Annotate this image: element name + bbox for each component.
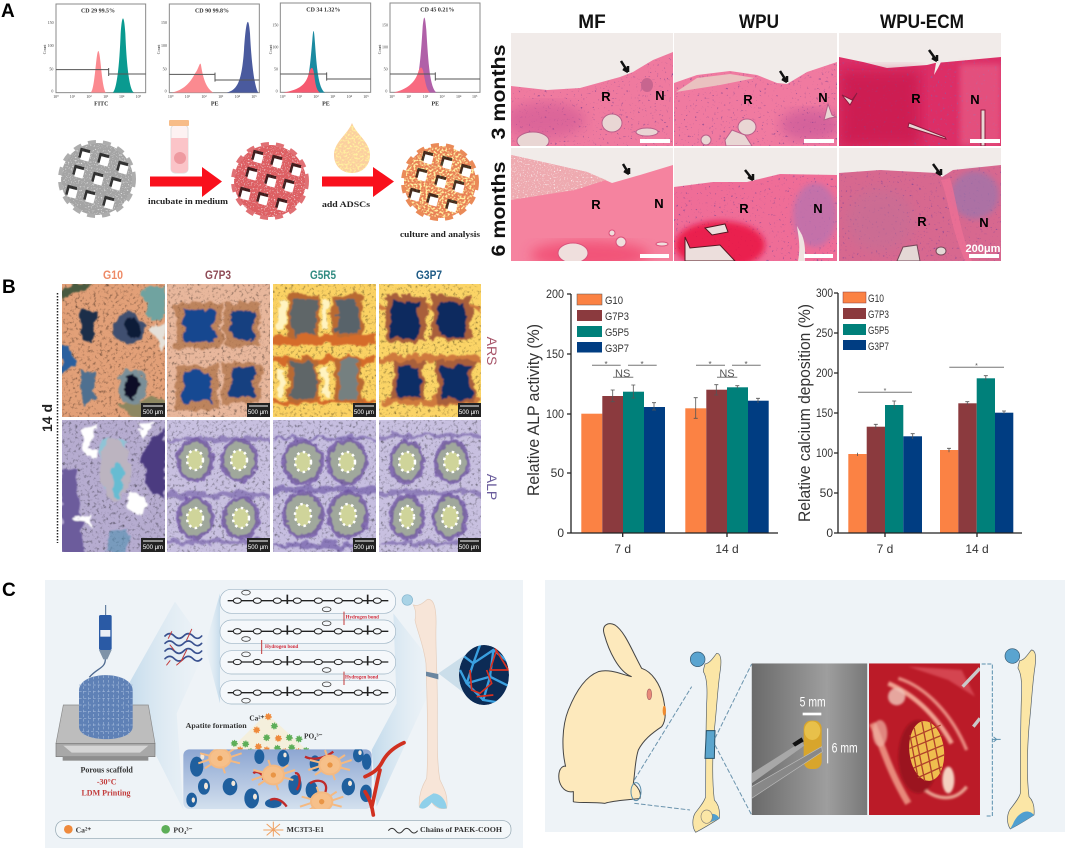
- legend: G3P7: [868, 341, 889, 353]
- histogram CD 34: 0: [276, 89, 278, 94]
- tick labels: [546, 287, 739, 556]
- ARS image: G10: 500 μm: [143, 410, 163, 416]
- dashed zoom lines: femur to photos: [715, 664, 752, 815]
- ALP image: G3P7: [379, 420, 481, 552]
- tick labels: 0: [557, 526, 564, 540]
- column titles: histology: WPU-ECM: [880, 12, 964, 33]
- row label: 14 d: 14 d: [39, 404, 55, 432]
- femur bone: [402, 595, 447, 809]
- tick labels: 200: [546, 287, 564, 301]
- histogram CD 29: 100: [48, 43, 54, 48]
- tick labels: 7 d: [877, 542, 893, 556]
- histogram CD 45: 100: [382, 45, 388, 50]
- histogram CD 29: [42, 4, 146, 107]
- apatite labels: PO₄³⁻: [304, 731, 323, 740]
- tick labels: 100: [546, 407, 564, 421]
- histogram CD 90: Count: [156, 44, 161, 54]
- histogram CD 29: 150: [48, 20, 54, 25]
- axes: [567, 294, 778, 537]
- panel label C: C: [2, 580, 16, 601]
- histogram CD 29: 10³: [103, 94, 109, 99]
- histology: WPU-ECM 6 months: [839, 148, 1001, 261]
- histogram CD 29: 10⁵: [136, 94, 142, 99]
- apatite labels: [186, 713, 323, 740]
- histogram CD 45: PE: [432, 101, 439, 107]
- histology: WPU-ECM 3 months: [839, 33, 1001, 146]
- polymer chain capsules: [220, 589, 396, 704]
- tick labels: 50: [551, 466, 564, 480]
- apatite formation particles: [230, 713, 309, 754]
- tick labels: 150: [816, 406, 833, 420]
- histogram CD 29: 10²: [86, 94, 92, 99]
- histology: WPU 6 months: N: [813, 201, 823, 216]
- bars: 14 d: [685, 387, 769, 533]
- hydrogen bond labels: Hydrogen bond: [265, 645, 299, 650]
- histogram CD 45: 10⁰: [389, 94, 395, 99]
- hydrogen bond labels: Hydrogen bond: [345, 676, 379, 681]
- printing platform: [56, 705, 155, 761]
- histogram CD 34: 100: [272, 45, 278, 50]
- legend: [843, 292, 889, 353]
- photo: scaffold on forceps: 5 mm: [800, 694, 826, 710]
- photo: scaffold on forceps: [752, 663, 867, 815]
- porous tube with cells: [183, 749, 372, 809]
- significance marks: *: [640, 360, 644, 369]
- significance marks: [592, 360, 761, 380]
- row labels: histology: 6 months: [489, 162, 510, 256]
- tick labels: 100: [816, 446, 833, 460]
- histogram CD 29: CD 29 99.5%: [81, 8, 115, 14]
- histogram CD 90: 0: [165, 89, 167, 94]
- histology: WPU 3 months: N: [818, 90, 828, 105]
- histogram CD 90: PE: [211, 101, 218, 107]
- histogram CD 34: 10⁴: [347, 94, 353, 99]
- label: culture and analysis: culture and analysis: [400, 229, 481, 239]
- femur with implant site: [690, 652, 721, 832]
- histogram CD 45: 10¹: [406, 94, 412, 99]
- histogram CD 34: 150: [272, 23, 278, 28]
- legend strip: MC3T3-E1: [287, 825, 324, 834]
- histogram CD 45: CD 45 0.21%: [420, 7, 454, 13]
- porous cylinder scaffold: [79, 675, 133, 739]
- histogram CD 34: PE: [322, 101, 330, 107]
- red scaffold: [233, 144, 307, 218]
- rabbit illustration: [559, 624, 666, 803]
- significance marks: *: [708, 360, 712, 369]
- ALP image: G10: 500 μm: [143, 545, 163, 551]
- scaffold caption: [80, 766, 133, 797]
- stain label: ARS: ARS: [484, 337, 500, 365]
- histogram CD 34: 50: [274, 67, 278, 72]
- histogram CD 90: 10³: [218, 94, 224, 99]
- scaffold caption: Porous scaffold: [80, 766, 133, 775]
- histogram CD 45: [377, 3, 480, 107]
- ARS image: G3P7: [379, 284, 481, 417]
- histology: WPU 6 months: [674, 148, 837, 269]
- histology: MF 6 months: N: [654, 196, 664, 211]
- histology: MF 3 months: [505, 33, 673, 150]
- ARS image: G7P3: 500 μm: [248, 410, 268, 416]
- blood vessel: [365, 743, 404, 815]
- histogram CD 34: 10¹: [297, 94, 303, 99]
- column headers: G10 to G3P7: G7P3: [205, 268, 231, 282]
- histogram CD 90: 100: [161, 43, 167, 48]
- histogram CD 45: Count: [377, 44, 382, 54]
- label: incubate in medium: incubate in medium: [148, 196, 228, 206]
- legend: G7P3: [605, 311, 629, 323]
- panel A: scaffold preparation workflow: [60, 120, 481, 239]
- legend strip: Chains of PAEK-COOH: [420, 825, 502, 834]
- dotted time marker: [56, 293, 58, 543]
- histogram CD 29: 10¹: [70, 94, 76, 99]
- tick labels: 14 d: [715, 542, 739, 556]
- histogram CD 45: 50: [384, 67, 388, 72]
- histogram CD 34: CD 34 1.32%: [306, 7, 340, 13]
- arrow: incubate: [150, 167, 222, 197]
- histogram CD 29: FITC: [94, 101, 108, 107]
- legend strip: Ca²⁺: [76, 825, 91, 834]
- column headers: G10 to G3P7: G10: [103, 268, 123, 282]
- panel C right: rabbit implantation model: [545, 580, 1065, 832]
- histology: MF 6 months: [511, 148, 673, 269]
- legend strip: [56, 821, 511, 838]
- gray scaffold: [60, 142, 134, 216]
- histogram CD 45: 10²: [423, 94, 429, 99]
- legend strip: PO₄³⁻: [173, 825, 193, 834]
- ALP image: G5R5: [273, 420, 376, 552]
- legend: G10: [868, 293, 884, 305]
- histogram CD 45: 10³: [439, 94, 445, 99]
- histogram CD 34: Count: [268, 44, 273, 54]
- histology: MF 3 months: R: [601, 89, 611, 104]
- legend: G7P3: [868, 309, 889, 321]
- bars: 7 d: [848, 405, 922, 533]
- error bars: [858, 376, 1006, 456]
- histogram CD 90: [156, 4, 259, 107]
- histology: WPU 3 months: [674, 33, 840, 146]
- ARS image: G7P3: [167, 284, 270, 417]
- histogram CD 90: CD 90 99.8%: [195, 8, 229, 14]
- histogram CD 29: 10⁰: [53, 94, 59, 99]
- histogram CD 34: [268, 3, 371, 107]
- error bars: [611, 385, 760, 418]
- column titles: histology: WPU: [739, 12, 779, 33]
- bar chart: relative ALP activity: [524, 287, 778, 556]
- y-axis title: Relative calcium deposition (%): [795, 304, 814, 522]
- column titles: histology: MF: [578, 12, 606, 33]
- label: add ADSCs: add ADSCs: [322, 199, 371, 209]
- tick labels: 0: [826, 526, 833, 540]
- histogram CD 29: Count: [42, 44, 47, 54]
- photo: scaffold on forceps: 6 mm: [832, 740, 858, 756]
- panel C left: low-temperature printing schematic: [45, 580, 523, 848]
- histogram CD 90: 50: [163, 67, 167, 72]
- ARS image: G5R5: 500 μm: [354, 410, 374, 416]
- ALP image: G7P3: 500 μm: [248, 545, 268, 551]
- row labels: histology: [489, 44, 510, 256]
- zoom fan to micro-structure: [438, 655, 467, 695]
- legend: G5P5: [605, 327, 629, 339]
- histogram CD 34: 10⁰: [280, 94, 286, 99]
- ALP image: G10: [62, 420, 165, 552]
- histogram CD 34: 10⁵: [363, 94, 369, 99]
- legend: G5P5: [868, 325, 889, 337]
- panel label A: A: [1, 1, 15, 22]
- ALP image: G7P3: [167, 420, 270, 552]
- micro-structure circle: [459, 645, 510, 705]
- significance marks: *: [604, 360, 608, 369]
- significance marks: *: [975, 363, 978, 370]
- apatite labels: Apatite formation: [186, 721, 247, 730]
- panel label B: B: [2, 277, 16, 298]
- tick labels: 150: [546, 347, 564, 361]
- histogram CD 29: 50: [49, 67, 53, 72]
- arrow: add ADSCs: [322, 167, 394, 197]
- column headers: G10 to G3P7: G5R5: [310, 268, 336, 282]
- histogram CD 45: 10⁴: [456, 94, 462, 99]
- axes: [834, 293, 1022, 537]
- histology: WPU 3 months: R: [743, 92, 753, 107]
- histology: MF 3 months: N: [655, 88, 665, 103]
- histology: WPU 6 months: R: [739, 201, 749, 216]
- scaffold caption: -30°C: [97, 777, 117, 786]
- dashed bracket: [982, 664, 1001, 816]
- significance marks: *: [884, 388, 887, 395]
- column headers: G10 to G3P7: G3P7: [416, 268, 442, 282]
- scaffold caption: LDM Printing: [81, 788, 131, 797]
- print nozzle: [89, 605, 112, 677]
- histogram CD 45: 10⁵: [472, 94, 478, 99]
- histogram CD 90: 10⁵: [251, 94, 257, 99]
- column headers: G10 to G3P7: [103, 268, 442, 282]
- ALP image: G3P7: 500 μm: [459, 545, 479, 551]
- histogram CD 34: 10³: [330, 94, 336, 99]
- tick labels: 14 d: [965, 542, 989, 556]
- hydrogen bond labels: Hydrogen bond: [346, 615, 379, 620]
- icon: culture tube: [169, 120, 189, 173]
- histogram CD 90: 10²: [201, 94, 207, 99]
- hydrogen bond labels: [265, 615, 379, 681]
- significance marks: *: [744, 360, 748, 369]
- icon: ADSC droplet: [334, 123, 370, 173]
- histogram CD 45: 0: [385, 89, 387, 94]
- bars: 7 d: [581, 392, 665, 533]
- histogram CD 90: 10⁴: [235, 94, 241, 99]
- histology: WPU-ECM 6 months: 200μm: [966, 243, 1001, 255]
- ARS image: G5R5: [273, 284, 376, 417]
- panel A: flow cytometry histograms: [42, 3, 480, 107]
- ARS image: G3P7: 500 μm: [459, 410, 479, 416]
- ARS image: G10: [62, 284, 165, 417]
- significance marks: [858, 363, 1004, 395]
- apatite labels: Ca²⁺: [249, 713, 264, 722]
- tick labels: 50: [820, 486, 833, 500]
- histogram CD 29: 10⁴: [119, 94, 125, 99]
- orange scaffold: [403, 145, 477, 219]
- y-axis title: Relative ALP activity (%): [524, 324, 543, 496]
- tick labels: [816, 286, 989, 556]
- stain label: ALP: ALP: [484, 474, 500, 500]
- histology: WPU-ECM 3 months: N: [970, 92, 980, 107]
- significance marks: NS: [719, 368, 735, 380]
- legend: G3P7: [605, 343, 629, 355]
- histogram CD 45: 150: [382, 23, 388, 28]
- histogram CD 34: 10²: [313, 94, 319, 99]
- bars: 14 d: [940, 378, 1013, 533]
- column titles: histology: [578, 12, 964, 33]
- histogram CD 90: 10⁰: [168, 94, 174, 99]
- histogram CD 29: 0: [51, 89, 53, 94]
- photo: implanted scaffold in surgical site: [869, 663, 980, 815]
- dashed zoom lines: rabbit to femur: [634, 687, 692, 810]
- histology: WPU-ECM 6 months: N: [979, 215, 989, 230]
- healed femur: [1005, 649, 1036, 829]
- tick labels: 250: [816, 326, 833, 340]
- legend: G10: [605, 295, 623, 307]
- tick labels: 7 d: [614, 542, 631, 556]
- histology: WPU-ECM 6 months: R: [917, 214, 927, 229]
- tick labels: 200: [816, 366, 833, 380]
- ALP image: G5R5: 500 μm: [354, 545, 374, 551]
- tick labels: 300: [816, 286, 833, 300]
- legend: [577, 294, 629, 355]
- histogram CD 90: 150: [161, 20, 167, 25]
- row labels: histology: 3 months: [489, 44, 510, 140]
- significance marks: NS: [615, 368, 630, 380]
- histology: MF 6 months: R: [591, 197, 601, 212]
- histology: WPU-ECM 3 months: R: [911, 91, 921, 106]
- PAEK-COOH wavy chains: [165, 629, 202, 665]
- histogram CD 90: 10¹: [185, 94, 191, 99]
- bar chart: relative calcium deposition: [795, 286, 1022, 556]
